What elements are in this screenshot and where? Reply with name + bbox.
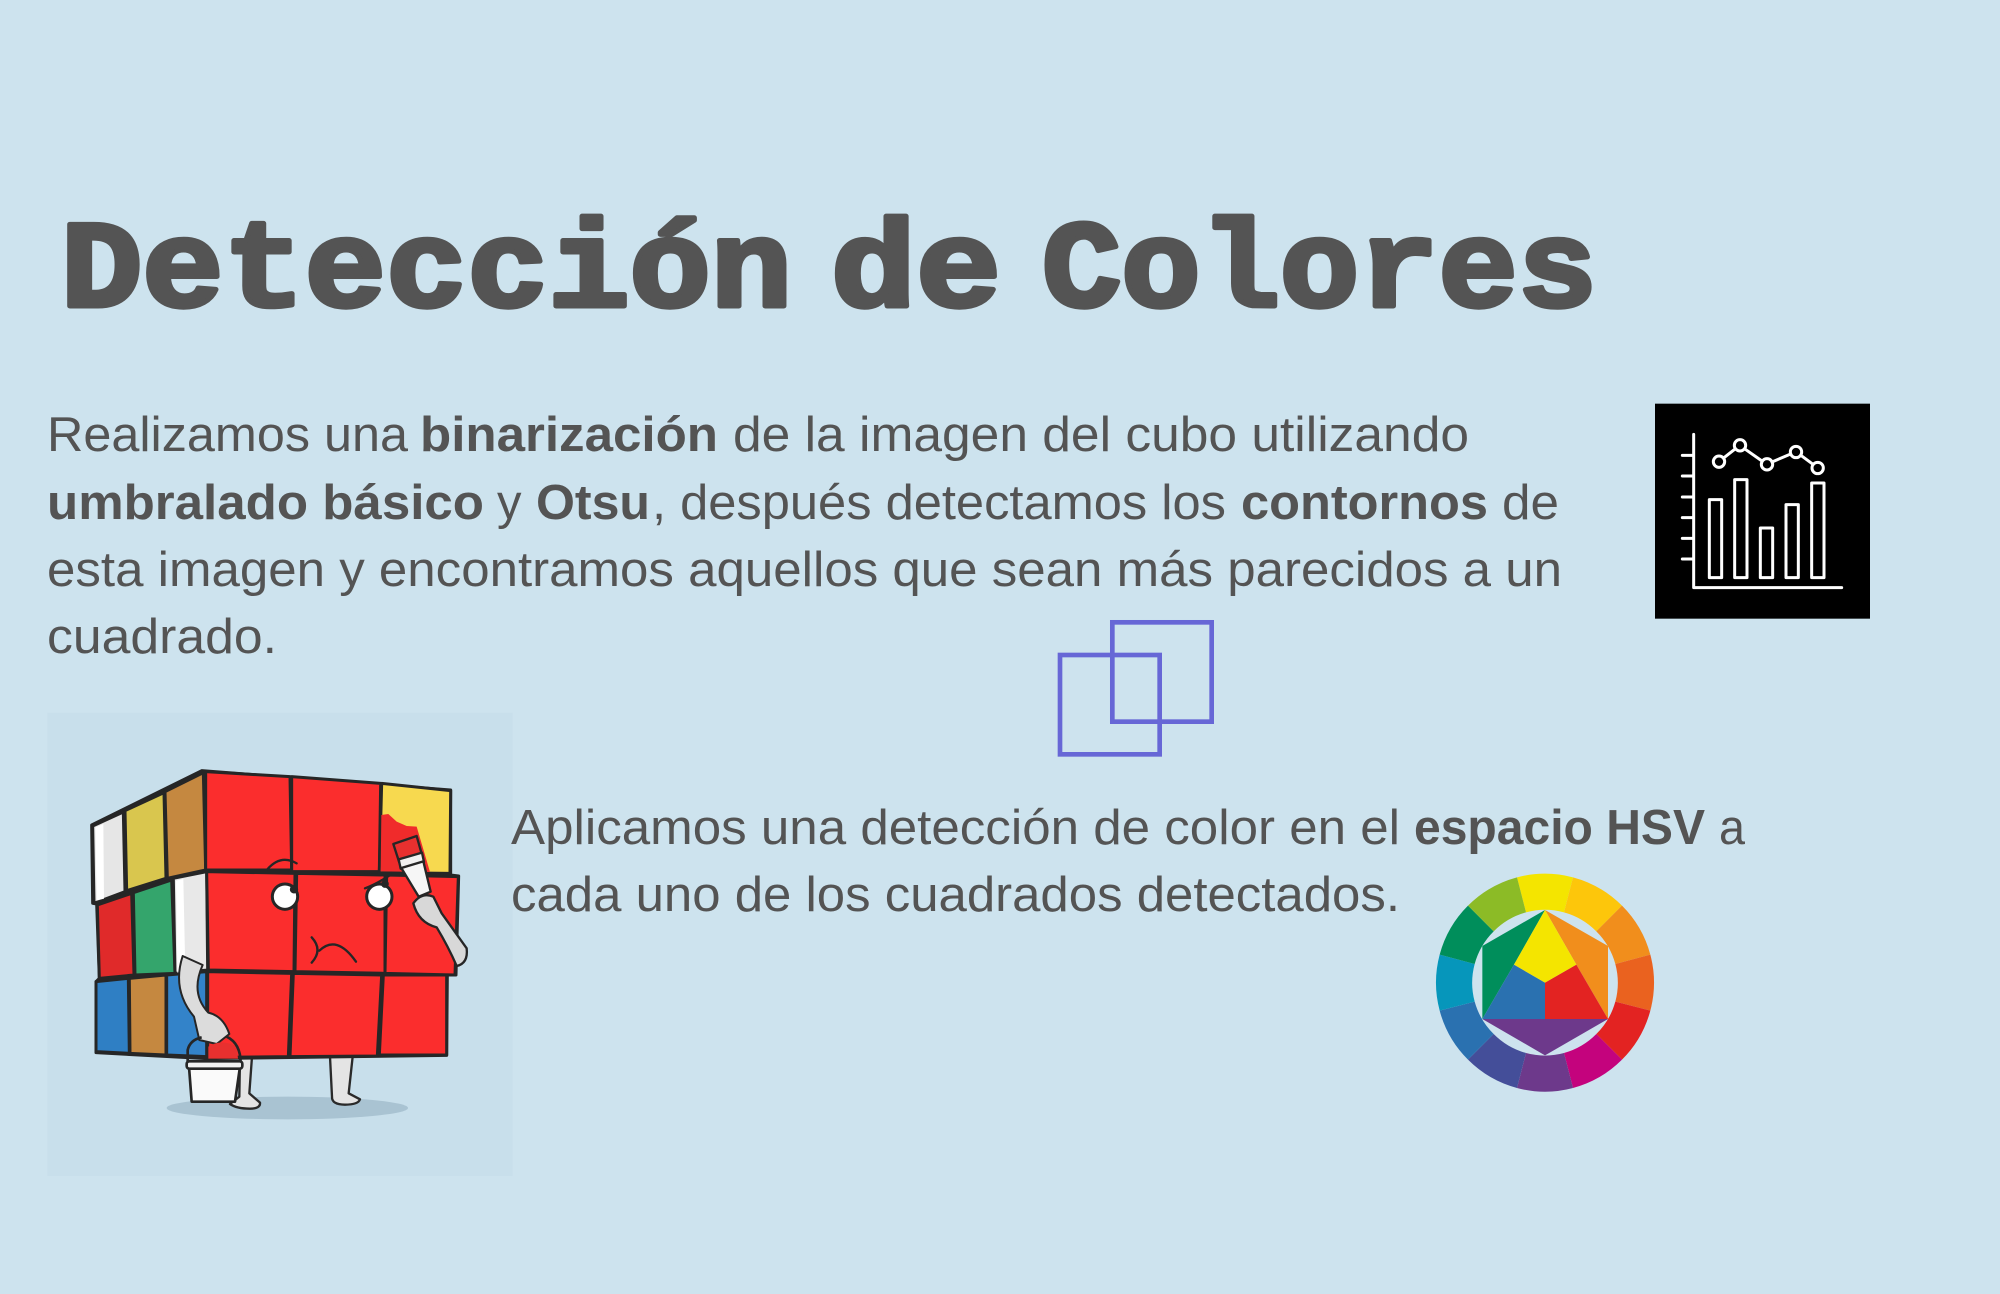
text block: HSV detection: a	[1719, 801, 1746, 855]
text block: binarization: esta imagen y encontramos aquellos que sean más parecidos a un	[47, 543, 1562, 597]
text block: binarization: y	[497, 476, 522, 530]
text block: binarization: contornos	[1241, 476, 1488, 530]
text block: binarization: de la imagen del cubo utilizando	[733, 408, 1469, 462]
icon: Itten color wheel	[1436, 874, 1654, 1092]
bucket	[187, 1037, 242, 1102]
outer ring	[1436, 874, 1654, 1092]
icon: bar and line chart	[1655, 404, 1870, 619]
text block: binarization: cuadrado.	[47, 610, 277, 664]
left arm holding bucket	[179, 956, 229, 1044]
image panel	[47, 713, 513, 1176]
text block: binarization: Realizamos una	[47, 408, 409, 462]
title: Colores	[1042, 204, 1597, 344]
ground shadow	[167, 1097, 408, 1119]
text block: binarization: binarización	[420, 408, 718, 462]
icon: overlapping squares	[1060, 622, 1212, 754]
text block: HSV detection: Aplicamos una detección de color en el	[511, 801, 1400, 855]
text block: binarization: de	[1502, 476, 1559, 530]
inner triangles	[1482, 910, 1608, 1055]
illustration: rubik's cube character painting itself	[47, 713, 513, 1176]
title	[61, 204, 1597, 344]
title: Detección	[61, 204, 792, 344]
title: de	[831, 204, 1001, 344]
text block: binarization: Otsu	[536, 476, 650, 530]
paint splash	[381, 814, 430, 872]
paintbrush and right arm	[393, 836, 467, 966]
text block: binarization	[47, 408, 1562, 664]
legs	[230, 1057, 360, 1109]
text block: HSV detection	[511, 801, 1746, 922]
text block: HSV detection: cada uno de los cuadrados detectados.	[511, 868, 1400, 922]
cube body	[92, 771, 459, 1059]
text block: HSV detection: espacio HSV	[1414, 801, 1705, 855]
face	[267, 860, 392, 963]
white highlights	[95, 824, 185, 973]
text block: binarization: umbralado básico	[47, 476, 484, 530]
text block: binarization: , después detectamos los	[652, 476, 1226, 530]
